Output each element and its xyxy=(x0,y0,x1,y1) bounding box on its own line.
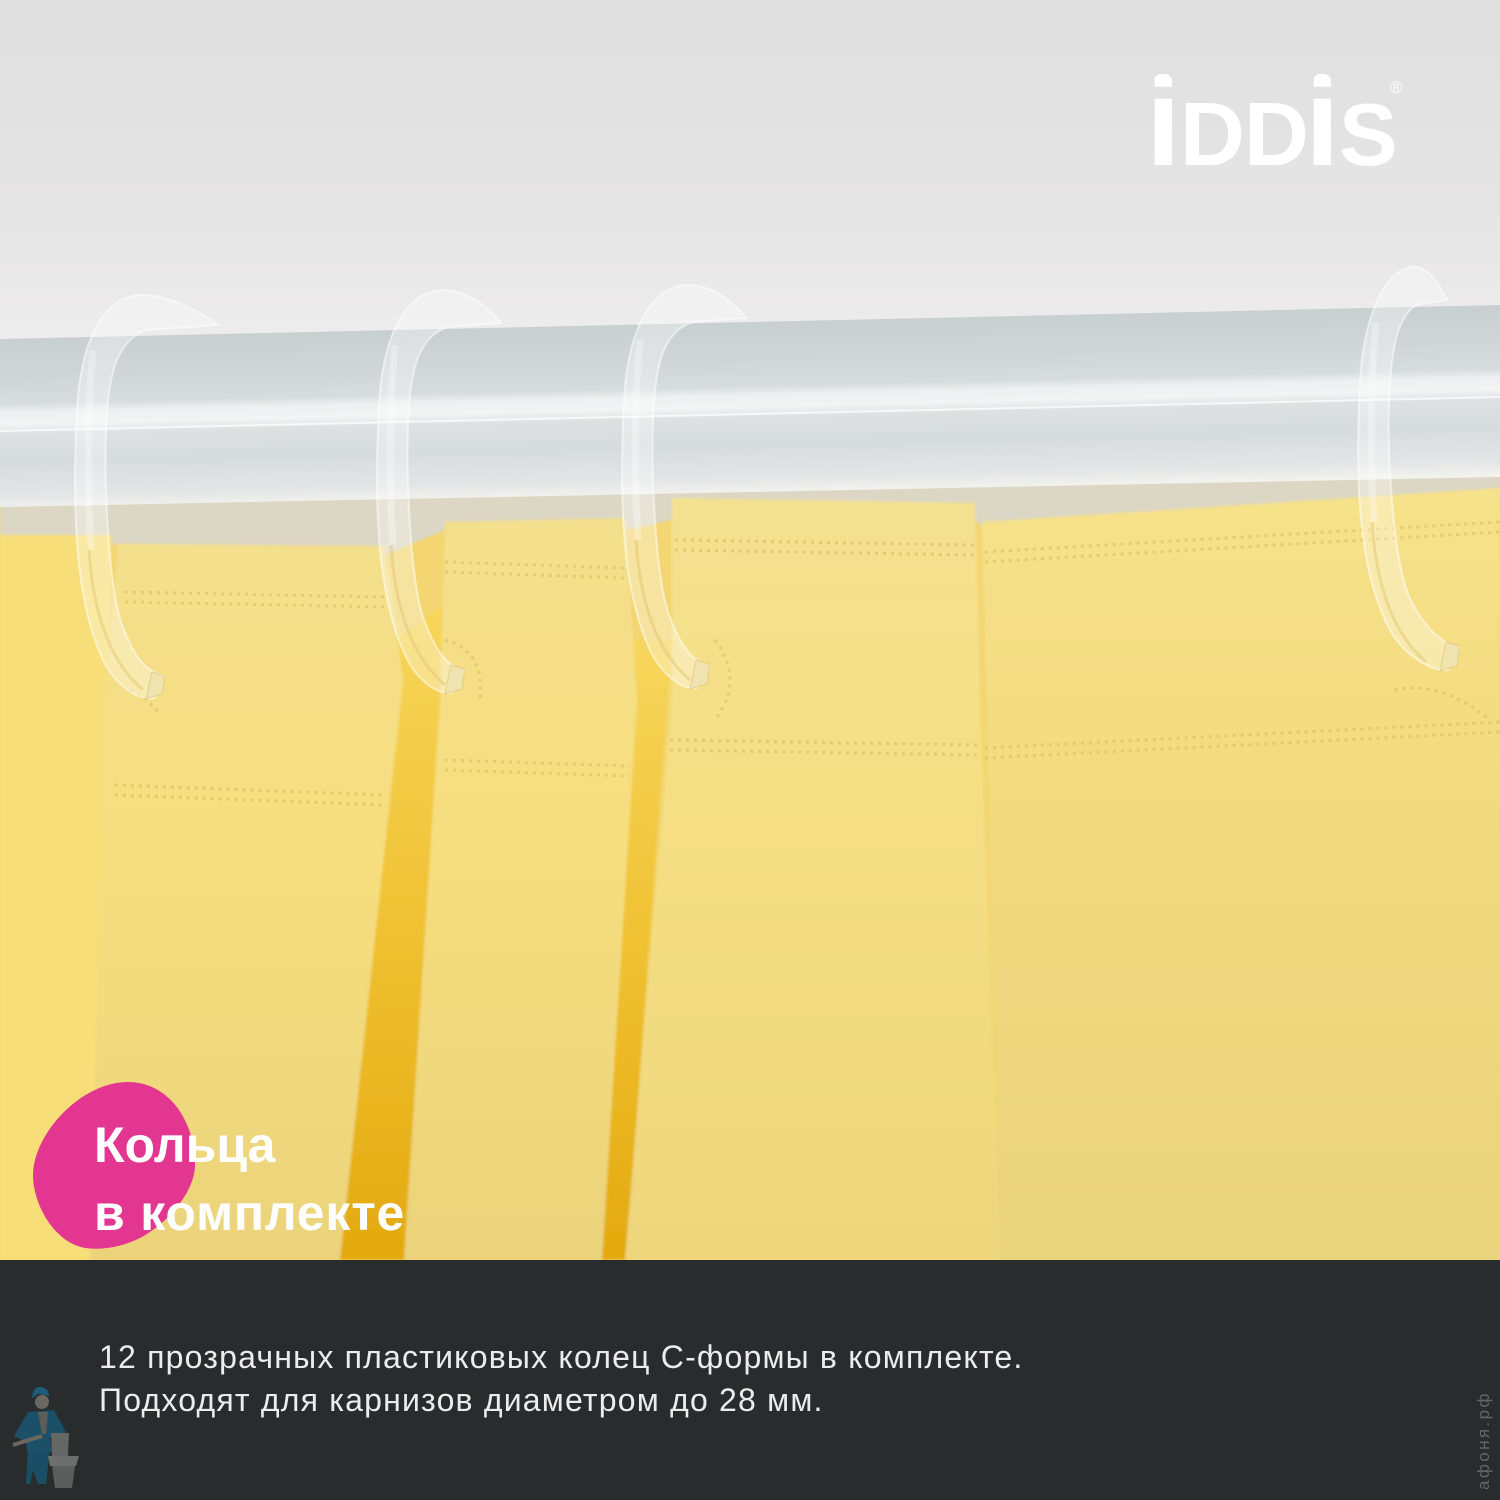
photo: curtain rod xyxy=(0,305,1500,507)
icon: plumber with toilet xyxy=(13,1387,79,1488)
wrench xyxy=(13,1436,42,1445)
brand logo: ® xyxy=(1390,78,1403,97)
brand logo xyxy=(1154,74,1402,166)
ring three xyxy=(622,285,746,689)
ring four xyxy=(1358,267,1460,671)
toilet tank xyxy=(51,1433,69,1456)
curtain folds and panels xyxy=(0,488,1500,1260)
curtain: first fold shadow xyxy=(338,600,450,1260)
plumber legs xyxy=(26,1448,50,1484)
plumber cap xyxy=(32,1387,49,1398)
photo: wall background xyxy=(0,0,1500,345)
plumber torso and arm xyxy=(14,1410,66,1452)
brand logo: D xyxy=(1244,85,1309,185)
watermark: афоня.рф xyxy=(1474,1391,1493,1490)
heading: rings included xyxy=(94,1117,405,1241)
heading: rings included: в комплекте xyxy=(94,1185,405,1241)
plumber head xyxy=(35,1395,49,1409)
shadow strip behind curtain tops xyxy=(0,450,1500,555)
brand logo: S xyxy=(1339,85,1398,184)
brand logo: D xyxy=(1180,85,1245,185)
curtain: second fold shadow xyxy=(600,640,672,1260)
stitching bands xyxy=(115,522,1500,805)
description text: Подходят для карнизов диаметром до 28 мм. xyxy=(99,1382,824,1418)
curtain: panel three xyxy=(625,498,1000,1260)
ring two xyxy=(377,290,501,694)
photo: yellow curtain xyxy=(0,450,1500,1260)
heading: rings included: Кольца xyxy=(94,1117,277,1173)
description text: 12 прозрачных пластиковых колец С-формы в комплекте. xyxy=(99,1339,1024,1375)
description text xyxy=(99,1339,1024,1418)
pink blob xyxy=(33,1082,195,1249)
bottom dark band xyxy=(0,1260,1500,1500)
rod: glossy highlight xyxy=(0,397,1500,431)
brand logo: i xyxy=(1146,53,1181,192)
toilet bowl xyxy=(48,1456,79,1466)
curtain: panel four xyxy=(982,488,1500,1260)
curtain: panel one xyxy=(90,544,403,1260)
toilet base xyxy=(52,1466,75,1488)
plumber shirt xyxy=(38,1412,48,1434)
ring one xyxy=(75,295,218,699)
brand logo: i xyxy=(1305,53,1340,192)
curtain: panel two xyxy=(404,518,637,1260)
curtain: left panel xyxy=(0,535,112,1260)
